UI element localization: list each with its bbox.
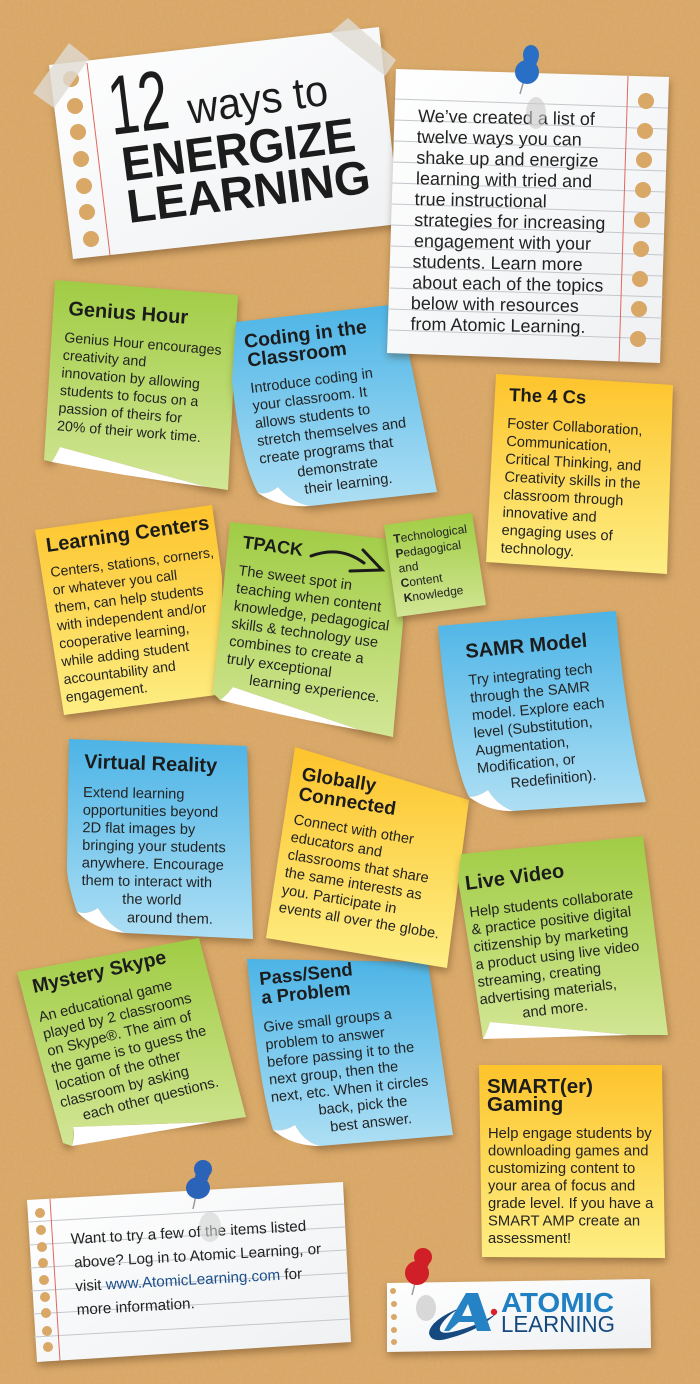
note: The 4 Cs: technology. — [500, 540, 575, 560]
note: SMART(er) Gaming: grade level. If you have a — [488, 1196, 654, 1212]
note: Live Video: a product using live video — [475, 939, 640, 973]
note: Coding in the Classroom — [232, 304, 437, 506]
note: Globally Connected: educators and — [289, 830, 383, 861]
footer text: Want to try a few of the items listed — [70, 1218, 307, 1248]
intro text: learning with tried and — [416, 168, 592, 191]
intro text: twelve ways you can — [417, 127, 582, 150]
note: Mystery Skype: An educational game — [37, 977, 174, 1026]
note: Globally Connected: Connected — [297, 784, 397, 820]
note: Mystery Skype: played by 2 classrooms — [41, 991, 193, 1043]
note: TPACK: skills & technology use — [231, 616, 379, 651]
logo paper — [387, 1279, 651, 1352]
note: Genius Hour: Genius Hour — [68, 298, 189, 329]
intro text: from Atomic Learning. — [410, 314, 586, 337]
icon: footer blue pin — [186, 1160, 221, 1242]
intro text: engagement with your — [414, 231, 591, 254]
intro paper — [387, 69, 669, 363]
note: Globally Connected: events all over the globe. — [278, 900, 440, 943]
note: The 4 Cs: Communication, — [506, 434, 612, 455]
note: Globally Connected: Globally — [300, 764, 378, 797]
note: Virtual Reality: around them. — [127, 910, 213, 928]
intro text: We’ve created a list of — [418, 106, 596, 129]
intro text: shake up and energize — [416, 148, 599, 171]
note: SMART(er) Gaming: SMART AMP create an — [488, 1214, 640, 1230]
note: TPACK: truly exceptional — [226, 651, 333, 681]
note: Coding in the Classroom: Introduce coding in — [249, 366, 374, 397]
note: The 4 Cs: Critical Thinking, and — [505, 452, 642, 475]
note: SAMR Model: through the SAMR — [470, 679, 591, 707]
icon: arrow to definition — [311, 550, 382, 571]
note: TPACK definition: T — [392, 531, 402, 546]
note: The 4 Cs: The 4 Cs — [509, 384, 587, 408]
footer text: above? Log in to Atomic Learning, or — [74, 1241, 322, 1272]
note: Pass/Send a Problem: before passing it to the — [266, 1040, 415, 1071]
footer paper — [27, 1182, 351, 1362]
note: Live Video: citizenship by marketing — [473, 922, 629, 956]
note: TPACK definition: P — [395, 546, 404, 561]
note: Mystery Skype — [17, 938, 246, 1146]
note: Live Video: & practice positive digital — [471, 904, 632, 938]
note: Learning Centers: with independent and/or — [55, 599, 208, 634]
note: The 4 Cs: classroom through — [503, 487, 624, 509]
note: Virtual Reality: opportunities beyond — [83, 803, 218, 821]
note: Learning Centers: Learning Centers — [45, 512, 211, 557]
note: Pass/Send a Problem: problem to answer — [265, 1025, 386, 1053]
note: Pass/Send a Problem: Pass/Send — [258, 958, 353, 989]
note: Coding in the Classroom: Classroom — [246, 339, 348, 372]
note: SMART(er) Gaming: SMART(er) — [487, 1075, 593, 1098]
title text: LEARNING — [124, 150, 373, 233]
note: Genius Hour: passion of theirs for — [58, 401, 183, 427]
note: The 4 Cs: Creativity skills in the — [504, 469, 641, 492]
note: TPACK definition: nowledge — [411, 583, 465, 604]
note: Coding in the Classroom: allows students to — [254, 402, 371, 432]
note: Pass/Send a Problem: next group, then the — [268, 1059, 399, 1088]
footer text: more information. — [76, 1295, 195, 1319]
intro text: below with resources — [411, 293, 579, 316]
note: SMART(er) Gaming: customizing content to — [488, 1161, 635, 1177]
note: Pass/Send a Problem: next, etc. When it circles — [270, 1074, 429, 1106]
note: The 4 Cs: engaging uses of — [501, 523, 614, 545]
footer text: visit — [75, 1277, 106, 1295]
note: Mystery Skype: each other questions. — [81, 1075, 220, 1124]
note: SAMR Model: Redefinition). — [510, 768, 597, 792]
note: Live Video: and more. — [522, 998, 589, 1022]
note: Virtual Reality: bringing your students — [82, 838, 226, 856]
note: Coding in the Classroom: stretch themselves and — [256, 415, 407, 450]
note: Learning Centers: cooperative learning, — [58, 620, 190, 651]
note: Mystery Skype: on Skype®. The aim of — [46, 1008, 194, 1060]
note: Coding in the Classroom: demonstrate — [296, 455, 379, 481]
note: TPACK: knowledge, pedagogical — [233, 598, 390, 635]
intro text: true instructional — [414, 189, 547, 211]
note: SAMR Model: Try integrating tech — [468, 661, 593, 689]
note: TPACK: teaching when content — [235, 581, 382, 616]
note: Virtual Reality — [67, 739, 253, 939]
note: Pass/Send a Problem: best answer. — [330, 1111, 413, 1136]
note: Learning Centers: Centers, stations, corners, — [49, 544, 215, 580]
footer text: www.AtomicLearning.com for — [105, 1266, 303, 1294]
note: Mystery Skype: Mystery Skype — [30, 946, 168, 998]
note: SMART(er) Gaming: Help engage students by — [488, 1126, 652, 1142]
title text: ways to — [184, 66, 331, 134]
note: Globally Connected — [266, 747, 469, 968]
note: SMART(er) Gaming: your area of focus and — [488, 1178, 635, 1194]
note: Mystery Skype: classroom by asking — [58, 1064, 191, 1111]
note: SAMR Model: model. Explore each — [471, 696, 605, 724]
note: SAMR Model: level (Substitution, — [473, 714, 593, 742]
note: Coding in the Classroom: their learning. — [304, 471, 393, 498]
note: TPACK: TPACK — [241, 532, 304, 560]
note: Globally Connected: you. Participate in — [281, 882, 398, 917]
note: Virtual Reality: the world — [122, 892, 182, 909]
note: TPACK: The sweet spot in — [237, 563, 353, 594]
note: Live Video: advertising materials, — [479, 977, 618, 1008]
note: Genius Hour: innovation by allowing — [61, 365, 200, 393]
note: Pass/Send a Problem — [247, 958, 453, 1146]
note: Globally Connected: classrooms that share — [286, 847, 430, 887]
note: SAMR Model — [438, 611, 646, 811]
note: Live Video: Help students collaborate — [469, 886, 634, 921]
logo: LEARNING — [501, 1311, 615, 1337]
note: TPACK: combines to create a — [228, 634, 365, 667]
note: Virtual Reality: them to interact with — [81, 873, 212, 891]
intro text: strategies for increasing — [414, 210, 606, 233]
title text: 12 — [103, 52, 174, 153]
note: Coding in the Classroom: your classroom. It — [252, 384, 368, 415]
note: SMART(er) Gaming: assessment! — [488, 1231, 571, 1247]
note: SMART(er) Gaming: Gaming — [487, 1093, 563, 1116]
note: The 4 Cs — [486, 374, 673, 574]
logo: ATOMIC — [501, 1287, 614, 1318]
note: Genius Hour: creativity and — [62, 348, 147, 370]
note: Virtual Reality: Extend learning — [83, 785, 185, 803]
note: Genius Hour: 20% of their work time. — [56, 418, 202, 446]
note: The 4 Cs: innovative and — [502, 505, 597, 526]
note: SMART(er) Gaming — [479, 1065, 665, 1258]
note: SAMR Model: Augmentation, — [475, 735, 570, 759]
note: Learning Centers: or whatever you call — [52, 567, 178, 598]
title paper — [33, 18, 400, 259]
intro text: about each of the topics — [412, 272, 603, 296]
note: Learning Centers — [35, 505, 230, 715]
note: Learning Centers: engagement. — [65, 679, 148, 705]
note: Mystery Skype: the game is to guess the — [50, 1023, 208, 1077]
note: Live Video — [458, 836, 668, 1039]
note: SMART(er) Gaming: downloading games and — [488, 1144, 648, 1160]
icon: blue pin — [515, 45, 546, 129]
note: TPACK — [213, 522, 403, 737]
note: Pass/Send a Problem: back, pick the — [318, 1093, 408, 1119]
title text: ENERGIZE — [119, 109, 358, 192]
note: The 4 Cs: Foster Collaboration, — [507, 416, 643, 439]
note: Pass/Send a Problem: a Problem — [260, 978, 351, 1008]
note: Live Video: Live Video — [464, 860, 565, 895]
note: Virtual Reality: anywhere. Encourage — [82, 855, 224, 874]
note: Live Video: streaming, creating — [477, 961, 602, 991]
note: TPACK definition: edagogical — [402, 538, 462, 560]
note: Mystery Skype: location of the other — [54, 1048, 183, 1094]
note: TPACK definition: and — [398, 559, 419, 576]
note: Learning Centers: them, can help students — [54, 582, 204, 616]
note: SAMR Model: Modification, or — [476, 752, 577, 777]
note: Pass/Send a Problem: Give small groups a — [263, 1006, 394, 1036]
note: TPACK definition — [384, 513, 486, 617]
note: Genius Hour: Genius Hour encourages — [64, 330, 222, 359]
note: Genius Hour — [44, 280, 238, 490]
intro text: students. Learn more — [412, 252, 583, 274]
icon: red pin — [405, 1248, 436, 1321]
note: Genius Hour: students to focus on a — [59, 383, 199, 410]
title text — [103, 52, 373, 233]
note: Globally Connected: Connect with other — [292, 812, 415, 848]
note: TPACK: learning experience. — [248, 673, 381, 706]
note: Coding in the Classroom: Coding in the — [243, 317, 368, 353]
note: Globally Connected: the same interests as — [284, 865, 423, 904]
note: Learning Centers: accountability and — [63, 658, 177, 687]
note: Coding in the Classroom: create programs that — [258, 435, 394, 468]
note: TPACK definition: ontent — [408, 571, 444, 589]
note: TPACK definition: K — [403, 590, 414, 605]
logo — [429, 1287, 615, 1340]
note: Virtual Reality: 2D flat images by — [82, 820, 196, 838]
note: TPACK definition: echnological — [400, 522, 468, 545]
note: Learning Centers: while adding student — [59, 638, 190, 669]
note: Virtual Reality: Virtual Reality — [84, 751, 218, 777]
note: SAMR Model: SAMR Model — [464, 630, 588, 663]
note: TPACK definition: C — [400, 575, 411, 590]
